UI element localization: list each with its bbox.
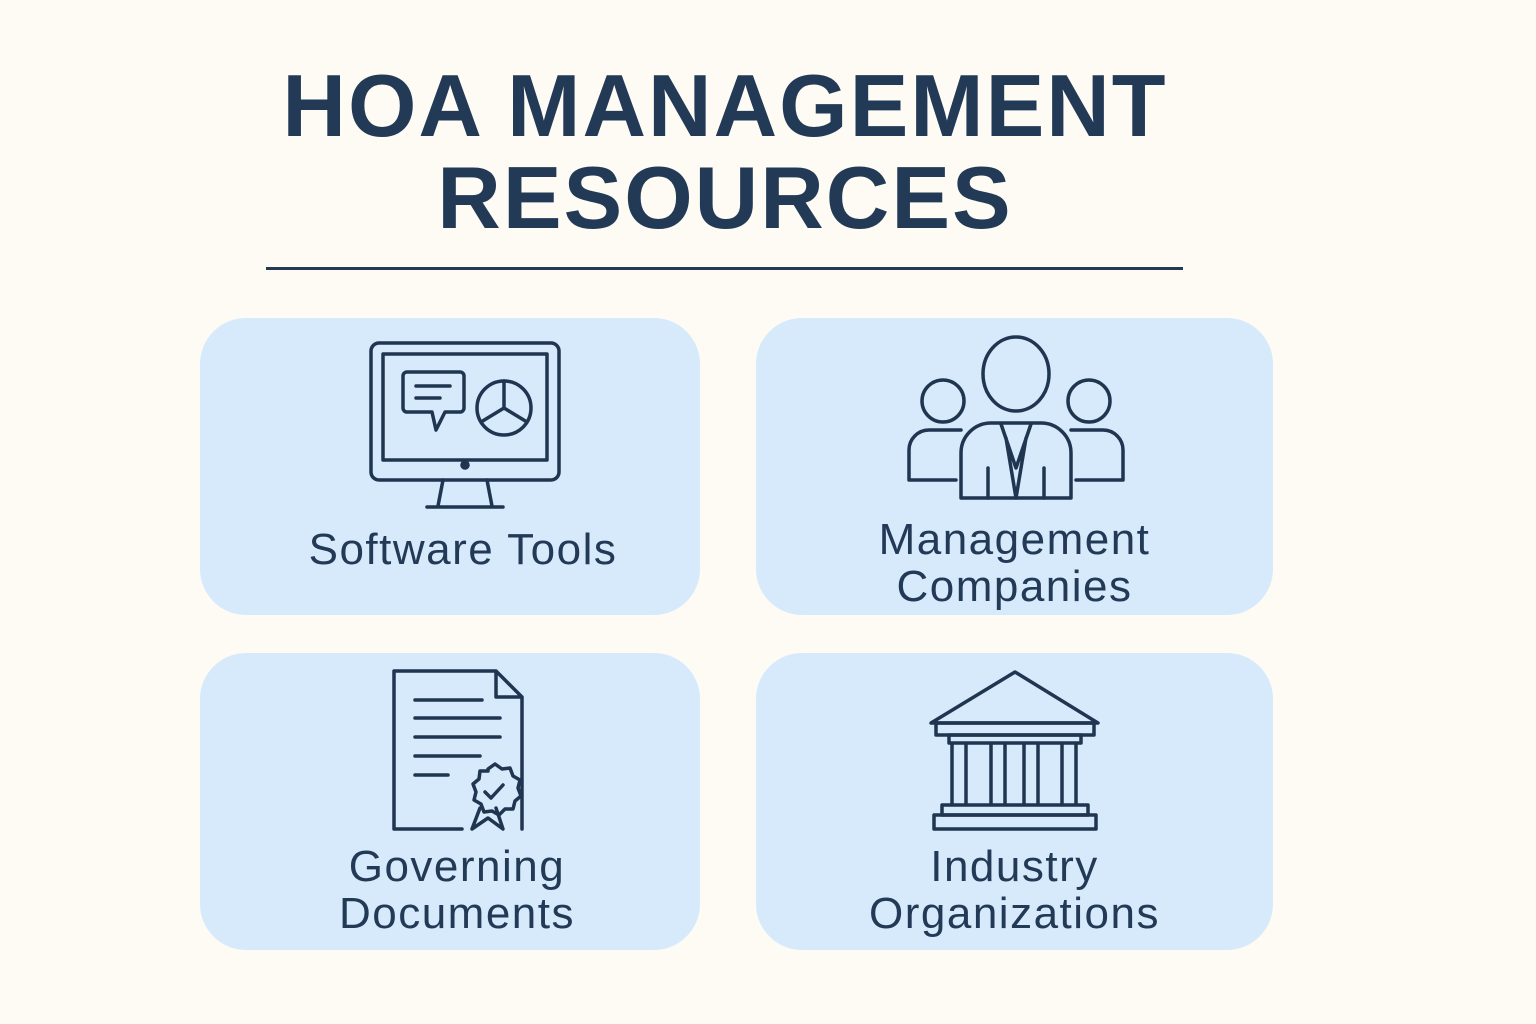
title [282, 56, 1168, 247]
icon: monitor [369, 341, 561, 509]
title: RESOURCES [437, 148, 1013, 247]
panel: industry organizations [756, 653, 1273, 950]
label: Management [879, 515, 1150, 564]
label [339, 842, 575, 938]
label: Companies [896, 562, 1133, 611]
icon: document [392, 669, 524, 831]
icon: building [929, 670, 1100, 831]
label [879, 515, 1150, 611]
panel: governing documents [200, 653, 700, 950]
label: Governing [349, 842, 565, 891]
label: Industry [930, 842, 1099, 891]
panel: management companies [756, 318, 1273, 615]
label [869, 842, 1160, 938]
panel: software tools [200, 318, 700, 615]
title: HOA MANAGEMENT [282, 56, 1168, 155]
icon: people [907, 335, 1125, 500]
label: Organizations [869, 889, 1160, 938]
label: Documents [339, 889, 575, 938]
label: Software Tools [309, 525, 617, 574]
